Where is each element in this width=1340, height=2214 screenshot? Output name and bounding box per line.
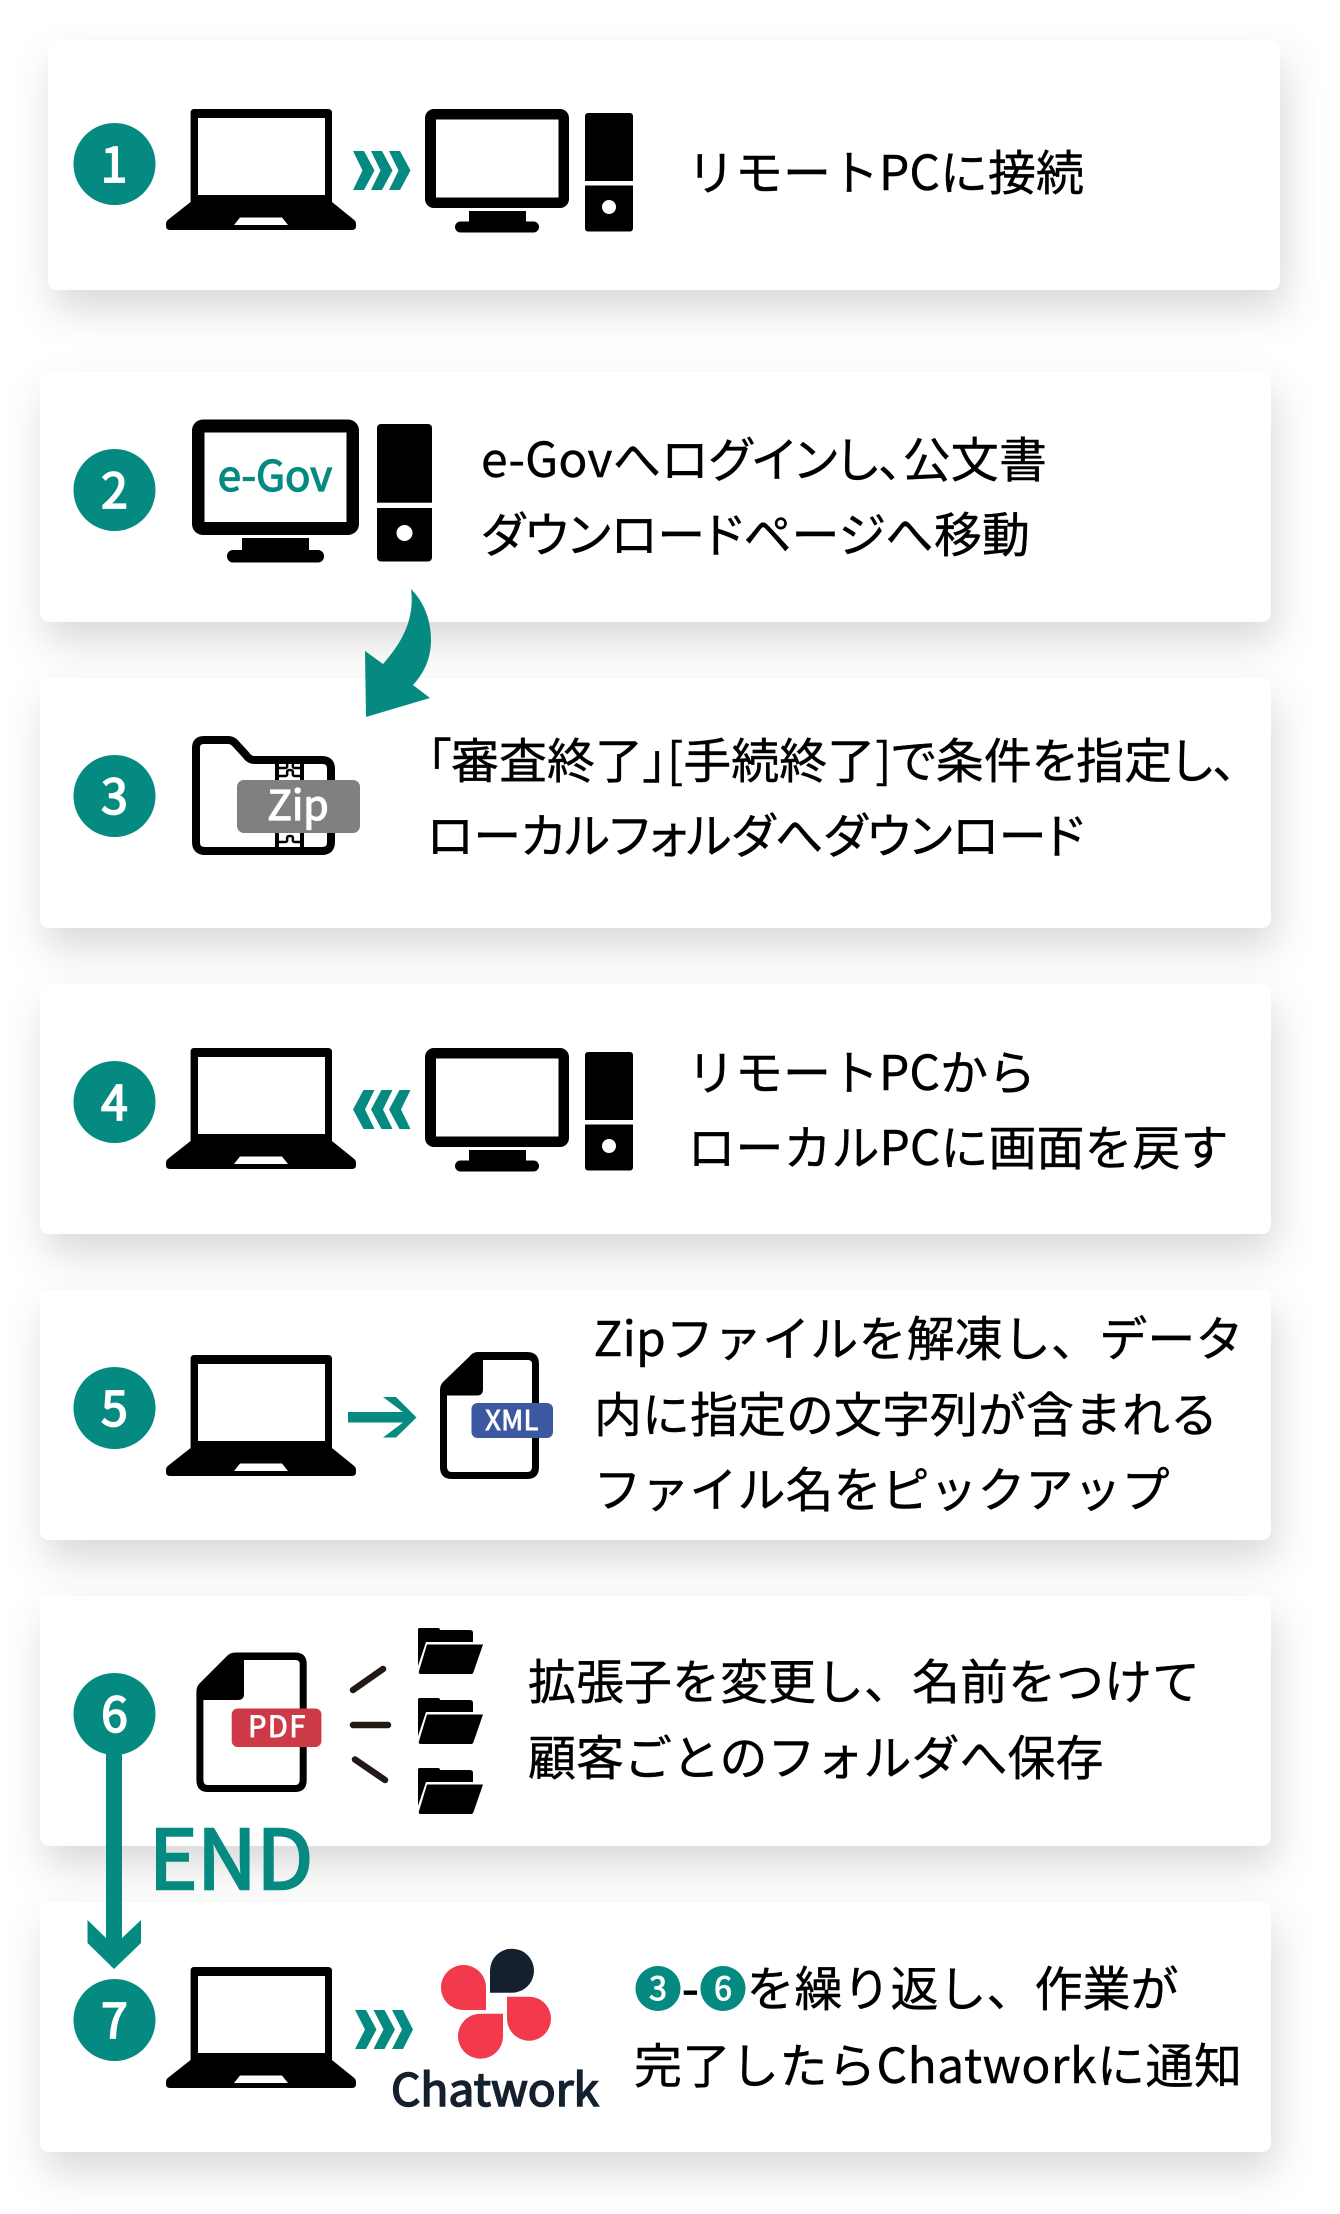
logo: Chatwork: Chatwork (391, 2054, 599, 2119)
step number 6: 6 (101, 1676, 128, 1746)
text: step 3 (427, 722, 1237, 867)
step number 6 (74, 1673, 156, 1755)
icon: PDF document: PDF (248, 1704, 307, 1746)
icon: XML document (440, 1352, 553, 1479)
step number 1 (74, 123, 156, 205)
icon: zip folder: Zip (267, 772, 329, 832)
panel 2: log in to e-Gov (40, 372, 1271, 622)
panel 4: return to local PC (40, 984, 1271, 1234)
text: step 7: 3 (649, 1964, 667, 2010)
icon: desktop PC with e-Gov screen (192, 420, 432, 562)
step number 4 (74, 1061, 156, 1143)
icon: branching lines (353, 1669, 388, 1780)
icon: desktop PC (425, 109, 633, 232)
text: step 7: 6 (714, 1964, 732, 2010)
text: step 6: 顧客ごとのフォルダへ保存 (528, 1719, 1104, 1789)
text: step 1: リモートPCに接続 (687, 134, 1084, 204)
step number 2: 2 (101, 452, 128, 522)
icon: PDF document (196, 1652, 321, 1792)
step number 1: 1 (101, 126, 127, 196)
icon: laptop (166, 1967, 356, 2088)
text: step 5: Zipファイルを解凍し、データ (594, 1300, 1244, 1370)
icon: laptop (166, 1048, 356, 1169)
logo: Chatwork (391, 1949, 599, 2119)
icon: laptop (166, 109, 356, 230)
arrow: down from step 6 to step 7 (88, 1750, 141, 1969)
step number 3: 3 (101, 758, 128, 828)
icon: laptop (166, 1355, 356, 1476)
step number 3 (74, 755, 156, 837)
icon: chevrons pointing left (353, 1090, 410, 1129)
text: step 3: 「審査終了」[手続終了]で条件を指定し、 (427, 722, 1237, 792)
label: END: END (149, 1794, 313, 1913)
step number 2 (74, 449, 156, 531)
text: step 4 (687, 1034, 1229, 1179)
step number 4: 4 (101, 1064, 128, 1134)
text: step 5 (594, 1300, 1244, 1521)
icon: arrow right (348, 1397, 416, 1438)
text: step 4: ローカルPCに画面を戻す (688, 1109, 1229, 1179)
text: step 3: ローカルフォルダへダウンロード (427, 797, 1084, 867)
step number 5 (74, 1367, 156, 1449)
step number 7: 7 (101, 1982, 128, 2052)
text: step 4: リモートPCから (687, 1034, 1036, 1104)
text: step 2: ダウンロードページへ移動 (481, 496, 1030, 566)
text: step 7: 完了したらChatworkに通知 (634, 2027, 1242, 2097)
icon: XML document: XML (485, 1399, 539, 1438)
panel 7: notify on Chatwork (40, 1902, 1271, 2152)
step number 5: 5 (101, 1370, 128, 1440)
text: step 5: 内に指定の文字列が含まれる (594, 1376, 1218, 1446)
arrow: curved from step 2 to step 3 (365, 589, 431, 717)
text: step 7 (634, 1950, 1242, 2097)
icon: zip folder (196, 740, 360, 851)
icon: three folders (418, 1628, 483, 1814)
text: step 7: を繰り返し、作業が (746, 1950, 1179, 2020)
text: step 2 (481, 421, 1047, 566)
panel 3: download zip (40, 678, 1271, 928)
panel 5: unzip and pick file names (40, 1290, 1271, 1540)
step number 7 (74, 1979, 156, 2061)
panel 6: rename and save to folders (40, 1596, 1271, 1846)
text: step 6 (528, 1643, 1200, 1789)
icon: chevrons pointing right (355, 2010, 413, 2049)
icon: desktop PC with e-Gov screen: e-Gov (218, 443, 332, 504)
icon: desktop PC (425, 1048, 633, 1172)
text: step 7: - (682, 1950, 699, 2020)
panel 1: connect to remote PC (48, 40, 1280, 290)
text: step 5: ファイル名をピックアップ (594, 1451, 1170, 1521)
text: step 6: 拡張子を変更し、名前をつけて (528, 1643, 1200, 1713)
icon: chevrons pointing right (353, 151, 410, 190)
text: step 2: e-Govへログインし、公文書 (481, 421, 1047, 491)
